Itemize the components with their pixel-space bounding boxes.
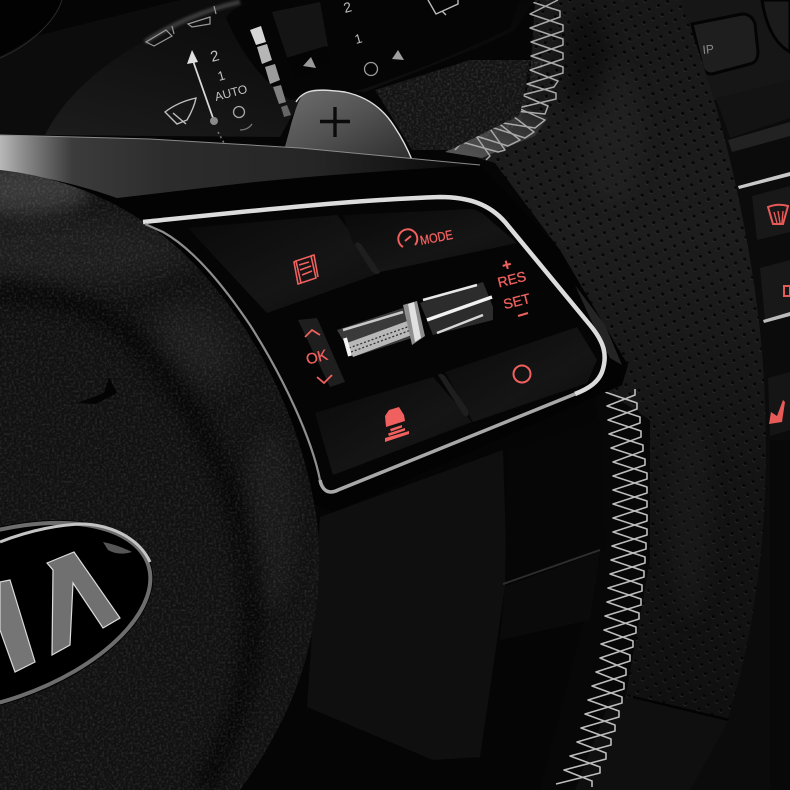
icon: car on lane xyxy=(385,407,409,442)
indicator bars xyxy=(250,26,291,117)
textured shroud behind paddle xyxy=(375,60,542,150)
cruise panel labels: + xyxy=(500,256,514,275)
plus sign xyxy=(320,107,350,137)
panel: wheel rim xyxy=(473,0,766,790)
badge: KIA emblem xyxy=(0,482,179,754)
rim shading xyxy=(540,10,712,790)
letter A xyxy=(47,552,120,655)
middle button xyxy=(760,260,790,320)
letter I xyxy=(0,580,35,672)
position labels xyxy=(209,47,249,104)
arrow xyxy=(187,50,225,145)
menu labels: OK xyxy=(304,347,329,369)
bezel base xyxy=(143,197,605,492)
cruise panel labels xyxy=(496,256,532,316)
button: document xyxy=(188,215,380,313)
icon: document xyxy=(294,255,318,284)
IP button xyxy=(692,14,758,74)
panel: wheel spoke xyxy=(0,135,628,512)
off circle xyxy=(234,106,244,118)
IP button: IP xyxy=(702,42,715,57)
defrost button xyxy=(752,186,790,240)
chrome roller switch xyxy=(337,282,493,357)
cruise panel labels: SET xyxy=(502,290,532,312)
roller left knurled xyxy=(337,308,415,357)
cruise panel labels: RES xyxy=(496,268,528,290)
icon: gauge xyxy=(398,229,417,247)
position labels: 2 xyxy=(209,47,221,66)
wiper marks: top xyxy=(146,6,216,46)
MODE label: MODE xyxy=(419,227,454,248)
position labels: 1 xyxy=(216,68,227,84)
second stalk labels: 1 xyxy=(353,31,364,47)
panel: steering hub leather xyxy=(0,164,330,790)
seat heater button xyxy=(768,372,790,436)
lower rim section xyxy=(575,697,729,790)
second stalk labels xyxy=(342,0,364,47)
lower chrome strip xyxy=(763,312,790,323)
thumb wheel xyxy=(272,2,330,80)
icon: wiper xyxy=(165,98,196,124)
emboss mark xyxy=(77,377,117,404)
menu labels xyxy=(298,318,345,387)
upper stitching xyxy=(445,0,563,160)
lower stitching xyxy=(556,389,647,787)
roller right xyxy=(420,282,493,335)
paddle shifter xyxy=(284,89,412,162)
icon: rear wiper xyxy=(428,0,458,15)
panel: right console xyxy=(640,0,790,790)
position labels: AUTO xyxy=(213,82,249,104)
panel: switch bezel xyxy=(143,197,605,492)
upper chrome strip xyxy=(738,172,790,189)
button: mode xyxy=(343,209,517,272)
chrome trim: left xyxy=(145,224,320,480)
chrome trim: bottom xyxy=(320,394,575,492)
stalk: wiper lever xyxy=(45,0,535,145)
center ring xyxy=(403,301,425,345)
seam: upper button divider xyxy=(355,242,380,274)
button: lane assist xyxy=(315,377,472,475)
button: cruise off circle xyxy=(445,327,597,422)
lower steering column cover xyxy=(307,420,605,760)
instrument binding texture top left xyxy=(0,0,240,135)
round knob xyxy=(762,0,790,52)
chrome trim: top and right xyxy=(143,197,605,394)
seam: lower button divider xyxy=(438,374,468,416)
vent band xyxy=(716,80,790,138)
